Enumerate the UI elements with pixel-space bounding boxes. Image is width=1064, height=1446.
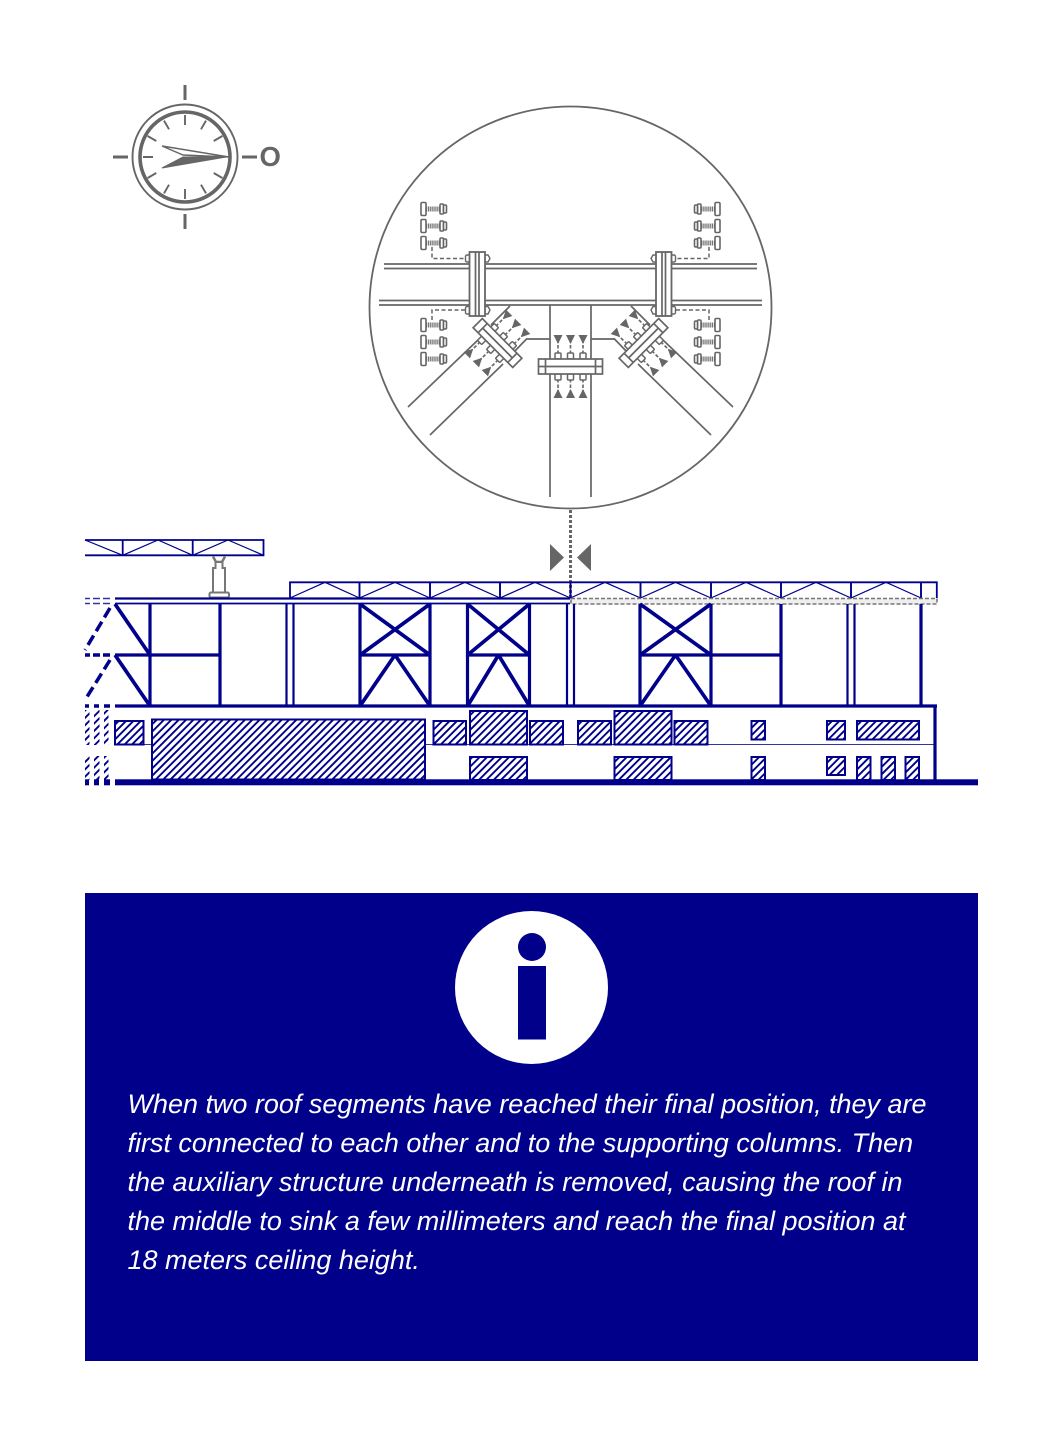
ground line: [85, 779, 978, 785]
magnified connection detail circle: [370, 106, 772, 508]
dashed outline of future chord: [571, 598, 937, 604]
central column fasteners: [554, 335, 588, 398]
steel frame and bracing: [115, 604, 937, 782]
intermediate floor line: [115, 744, 935, 746]
dashed leader line from detail to structure: [569, 510, 572, 598]
central column: [550, 305, 591, 497]
hatched dashes at left edge: [85, 710, 108, 780]
right half of joint with bolts and brace: [591, 202, 733, 435]
hatched interior volumes: [115, 711, 919, 780]
compass icon: [113, 85, 281, 229]
text block: explanation: the middle to sink a few millimeters and reach the final position at: [128, 1206, 906, 1236]
text block: explanation: When two roof segments have reached their final position, they are: [128, 1089, 927, 1119]
lower roof truss segments: [290, 582, 937, 598]
existing roof bottom chord: [85, 598, 570, 604]
text block: explanation: the auxiliary structure underneath is removed, causing the roof in: [128, 1167, 903, 1197]
dashed frame continuation at left: [85, 608, 110, 706]
icon: information: [455, 911, 608, 1064]
text block: explanation: first connected to each other and to the supporting columns. Then: [128, 1128, 913, 1158]
converging arrows: [550, 544, 591, 571]
raised roof truss segment: [85, 540, 264, 555]
compass icon: O: [260, 141, 281, 172]
text block: explanation: [128, 1089, 927, 1275]
left half of joint with bolts and brace: [408, 202, 550, 435]
text block: explanation: 18 meters ceiling height.: [128, 1245, 420, 1275]
panel: information: [85, 893, 978, 1361]
top chord beam: [379, 264, 762, 305]
central splice plate: [538, 359, 602, 374]
hydraulic jack: [210, 556, 229, 598]
